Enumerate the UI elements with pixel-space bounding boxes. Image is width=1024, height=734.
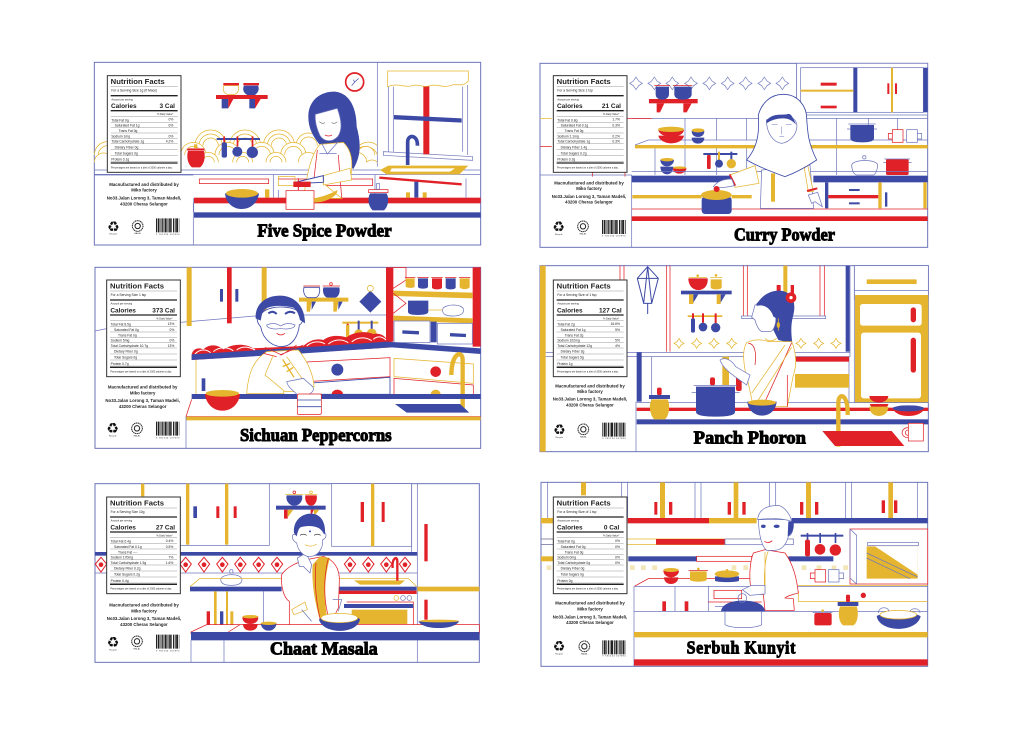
- oven box: [850, 529, 928, 584]
- nutrition facts: [107, 280, 180, 377]
- recycle, halal and barcode icons: 9 781234 567890: [156, 650, 180, 652]
- woman in headscarf: [713, 94, 822, 208]
- upper cabinets: [541, 482, 917, 518]
- blue shelf with pots: [681, 274, 732, 304]
- nutrition facts: Protein 0.7g: [111, 362, 129, 366]
- cutting board and mill: [286, 178, 337, 209]
- nutrition facts: % Daily Value*: [603, 317, 619, 320]
- recycle, halal and barcode icons: 9 781234 567890: [156, 234, 180, 236]
- nutrition facts: For a Serving Size 10g: [111, 510, 145, 514]
- nutrition facts: 13%: [168, 322, 174, 326]
- recycle, halal and barcode icons: [553, 423, 626, 440]
- nutrition facts: Calories: [557, 103, 583, 110]
- nutrition facts: % Daily Value*: [603, 534, 619, 537]
- recycle, halal and barcode icons: 9 781234 567890: [156, 437, 180, 439]
- nutrition facts: Saturated Fat 0.1g: [561, 124, 588, 128]
- blue bowl: [747, 400, 777, 416]
- nutrition facts: Percentages are based on a diet of 2000 calories a day.: [111, 166, 173, 169]
- recycle, halal and barcode icons: Recycle: [109, 649, 118, 651]
- woman in saree: [720, 291, 796, 407]
- panel: Serbuh Kunyit label: [541, 482, 928, 666]
- recycle, halal and barcode icons: ♻: [106, 421, 119, 437]
- tile ornaments: [630, 77, 789, 90]
- nutrition facts: Nutrition Facts: [111, 77, 165, 86]
- panel: Five Spice Powder label: [94, 62, 481, 245]
- manufacturer address: No33.Jalan Lorong 3, Taman Madeli,: [107, 616, 181, 621]
- worktop: [190, 558, 417, 594]
- rack with utensils: [217, 136, 260, 158]
- recycle, halal and barcode icons: Recycle: [109, 234, 118, 236]
- lower wall blocks: [637, 352, 849, 403]
- nutrition facts: 127 Cal: [599, 307, 622, 314]
- manufacturer address: Macnufactured and distributed by: [555, 601, 625, 606]
- faucet: [451, 354, 463, 408]
- nutrition facts: 0%: [169, 124, 173, 128]
- large plate: [319, 613, 360, 631]
- nutrition facts: 0%: [169, 134, 173, 138]
- manufacturer address: No33.Jalan Lorong 3, Taman Madeli,: [107, 195, 181, 200]
- nutrition facts: Amount per serving: [557, 98, 579, 101]
- manufacturer address: Miko factory: [130, 390, 156, 395]
- manufacturer address: 43200 Cheras Selangor: [119, 404, 167, 409]
- nutrition facts: Saturated Fat 0g: [114, 328, 139, 332]
- nutrition facts: Total Carbohydrate 12g: [557, 344, 592, 348]
- nutrition facts: 7%: [169, 556, 173, 560]
- counter bands: [634, 632, 928, 666]
- manufacturer address: [553, 383, 627, 408]
- nutrition facts: Total Fat 0.4g: [111, 540, 131, 544]
- nutrition facts: Percentages are based on a diet of 2000 calories a day.: [110, 371, 172, 374]
- recycle, halal and barcode icons: ♻: [107, 635, 119, 651]
- blue jar: [368, 183, 388, 210]
- blue shelf with pots: [276, 491, 326, 519]
- nutrition facts: Total Carbohydrate 1g: [557, 140, 590, 144]
- refrigerator: [854, 266, 928, 403]
- nutrition facts: Total Fat 0.8g: [557, 118, 578, 122]
- nutrition facts: Total Sugars 0.2g: [561, 151, 587, 155]
- recycle, halal and barcode icons: ♻: [553, 639, 565, 655]
- nutrition facts: Percentages are based on a diet of 2000 calories a day.: [557, 588, 619, 591]
- manufacturer address: 43200 Cheras Selangor: [566, 403, 614, 408]
- nutrition facts: % Daily Value*: [157, 113, 173, 116]
- nutrition facts: Trans Fat 0g: [565, 550, 584, 554]
- blue bowl: [225, 189, 259, 209]
- drawers: [196, 354, 481, 417]
- nutrition facts: 0%: [615, 561, 620, 565]
- nutrition facts: Calories: [557, 524, 583, 531]
- man with sash: [281, 514, 342, 625]
- upper cabinets: [141, 484, 479, 662]
- nutrition facts: Total Carbohydrate 10.7g: [111, 344, 148, 348]
- faint tile ornaments: [547, 565, 848, 570]
- pot with blue lid: [721, 594, 765, 628]
- blue pot with lid: [701, 186, 732, 214]
- hanging pot holder: [359, 285, 381, 313]
- nutrition facts: 13%: [168, 344, 174, 348]
- nutrition facts: 27 Cal: [156, 524, 175, 531]
- nutrition facts: 0%: [615, 545, 620, 549]
- nutrition facts: Nutrition Facts: [557, 281, 611, 290]
- recycle, halal and barcode icons: HALAL: [134, 647, 141, 650]
- nutrition facts: Sodium 1.1mg: [557, 134, 579, 138]
- kitchen scene: chaat masala: [95, 484, 479, 662]
- recycle, halal and barcode icons: [107, 219, 180, 236]
- recycle, halal and barcode icons: 9 781234 567890: [602, 438, 626, 440]
- manufacturer address: 43200 Cheras Selangor: [120, 622, 168, 627]
- nutrition facts: Trans Fat 0g: [118, 333, 137, 337]
- mugs: [810, 570, 844, 582]
- recycle, halal and barcode icons: Recycle: [109, 435, 117, 437]
- recycle, halal and barcode icons: [553, 639, 626, 658]
- mug: [902, 423, 923, 441]
- kitchen scene: five spice: [94, 62, 481, 245]
- manufacturer address: [552, 180, 626, 204]
- nutrition facts: 0 Cal: [604, 524, 620, 531]
- back shelf items: [634, 568, 928, 666]
- counter bands: [636, 402, 928, 452]
- nutrition facts: 0.3%: [612, 124, 620, 128]
- nutrition facts: Amount per serving: [111, 520, 133, 523]
- manufacturer address: Macnufactured and distributed by: [109, 603, 179, 608]
- nutrition facts: Total Sugars 5g: [561, 356, 584, 360]
- yellow shell tile pattern: [94, 130, 377, 162]
- nutrition facts: Nutrition Facts: [557, 77, 611, 86]
- rack with utensils: [342, 321, 378, 340]
- nutrition facts: Protein 0.2g: [557, 158, 575, 162]
- manufacturer address: Macnufactured and distributed by: [555, 383, 625, 388]
- nutrition facts: Total Fat 8.5g: [111, 323, 131, 327]
- nutrition facts: 0%: [169, 118, 173, 122]
- nutrition facts: 1.6%: [166, 561, 173, 565]
- nutrition facts: Trans Fat 0g: [119, 129, 138, 133]
- red jar: [187, 144, 205, 167]
- nutrition facts: Calories: [557, 307, 583, 314]
- kitchen shelf and items: [635, 124, 928, 148]
- nutrition facts: Percentages are based on a diet of 2000 calories a day.: [557, 166, 619, 169]
- manufacturer address: Miko factory: [131, 608, 157, 613]
- nutrition facts: 4.2%: [166, 140, 173, 144]
- nutrition facts: Amount per serving: [111, 98, 133, 101]
- counter: [632, 172, 928, 221]
- nutrition facts: Total Sugars 0.2g: [114, 573, 140, 577]
- nutrition facts: Sodium 1mg: [111, 134, 130, 138]
- manufacturer address: Miko factory: [577, 606, 603, 611]
- manufacturer address: Miko factory: [577, 389, 603, 394]
- nutrition facts: 0.2%: [612, 134, 620, 138]
- nutrition facts: 0.4%: [166, 539, 173, 543]
- wok: [877, 608, 921, 629]
- nutrition facts: Amount per serving: [557, 520, 579, 523]
- nutrition facts: Protein 1g: [557, 362, 573, 366]
- nutrition facts: Sodium 0mg: [557, 556, 576, 560]
- manufacturer address: No33.Jalan Lorong 3, Taman Madeli,: [552, 194, 626, 199]
- nutrition facts: % Daily Value*: [156, 317, 173, 320]
- manufacturer address: [553, 601, 627, 625]
- manufacturer address: Miko factory: [576, 186, 602, 191]
- rack with utensils: [703, 152, 737, 169]
- lantern: [637, 267, 658, 314]
- nutrition facts: 21 Cal: [602, 103, 621, 110]
- nutrition facts: % Daily Value*: [603, 113, 619, 116]
- rack with utensils: [801, 533, 843, 556]
- manufacturer address: Miko factory: [131, 188, 157, 193]
- nutrition facts: 0.3%: [612, 140, 620, 144]
- rack with utensils: [688, 313, 722, 333]
- recycle, halal and barcode icons: [106, 421, 180, 439]
- nutrition facts: Trans Fat 0g: [565, 129, 584, 133]
- product title: Curry Powder: [734, 225, 835, 245]
- nutrition facts: 4%: [615, 344, 620, 348]
- nutrition facts: Percentages are based on a diet of 2000 calories a day.: [557, 371, 619, 374]
- nutrition facts: Nutrition Facts: [110, 281, 164, 290]
- nutrition facts: Total Sugars 0g: [114, 356, 137, 360]
- recycle, halal and barcode icons: HALAL: [580, 435, 588, 438]
- manufacturer address: [107, 603, 181, 627]
- nutrition facts: 0%: [615, 539, 620, 543]
- kitchen scene: panch phoron: [540, 266, 928, 452]
- nutrition facts: 5%: [615, 339, 620, 343]
- nutrition facts: For a Serving Size 1 tsp: [111, 293, 146, 297]
- recycle, halal and barcode icons: Recycle: [555, 653, 564, 655]
- nutrition facts: Protein 0g: [557, 579, 573, 583]
- red and blue bands: [194, 198, 481, 218]
- recycle, halal and barcode icons: ♻: [552, 220, 565, 236]
- nutrition facts: 0%: [170, 328, 174, 332]
- window: [383, 71, 473, 160]
- red sink: [822, 431, 904, 446]
- cabinets: [187, 267, 267, 326]
- man in cap: [742, 505, 798, 610]
- nutrition facts: Dietary Fiber 1.4g: [561, 145, 587, 149]
- nutrition facts: Total Carbohydrate 1.5g: [111, 561, 146, 565]
- manufacturer address: No33.Jalan Lorong 3, Taman Madeli,: [553, 397, 627, 402]
- yellow tile ornaments: [674, 338, 841, 348]
- counter: [186, 394, 481, 448]
- shelving unit: [386, 267, 481, 347]
- woman cooking: [295, 92, 360, 198]
- product title: Chaat Masala: [270, 639, 378, 659]
- product title: Panch Phoron: [694, 427, 806, 447]
- nutrition facts: Total Sugars 0g: [561, 573, 584, 577]
- nutrition facts: For a Serving Size 1 tsp: [557, 89, 593, 93]
- nutrition facts: [107, 497, 180, 594]
- kitchen scene: curry: [540, 63, 928, 247]
- manufacturer address: No33.Jalan Lorong 3, Taman Madeli,: [105, 398, 180, 403]
- drawers: [199, 179, 373, 186]
- kitchen scene: serbuh kunyit: [541, 482, 928, 666]
- bowls: [242, 615, 459, 631]
- nutrition facts: Total Carbohydrate 0g: [557, 561, 590, 565]
- nutrition facts: Sodium 170mg: [111, 556, 133, 560]
- nutrition facts: Percentages are based on a diet of 2000 calories a day.: [110, 588, 172, 591]
- manufacturer address: 43200 Cheras Selangor: [565, 199, 613, 204]
- recycle, halal and barcode icons: Recycle: [555, 437, 564, 439]
- shelf with pots: [216, 83, 268, 108]
- lower wall items: [207, 591, 263, 625]
- lower left bowls: [660, 158, 687, 174]
- cabinets below: [634, 585, 928, 611]
- man cooking: [247, 296, 314, 396]
- product title: Sichuan Peppercorns: [240, 425, 392, 445]
- recycle, halal and barcode icons: HALAL: [580, 232, 587, 235]
- nutrition facts: Saturated Fat 1g: [561, 328, 586, 332]
- nutrition facts: Amount per serving: [111, 303, 133, 306]
- yellow shelf with pots: [299, 283, 348, 312]
- manufacturer address: Macnufactured and distributed by: [554, 180, 624, 185]
- nutrition facts: Total Carbohydrate 1g: [111, 140, 144, 144]
- nutrition facts: Dietary Fiber 0g: [561, 567, 584, 571]
- red shelf with pots: [649, 86, 698, 112]
- product title: Five Spice Powder: [257, 221, 392, 241]
- manufacturer address: No33.Jalan Lorong 3, Taman Madeli,: [553, 614, 627, 619]
- nutrition facts: 0.5%: [166, 545, 173, 549]
- yellow jar: [649, 388, 670, 419]
- nutrition facts: Dietary Fiber 3g: [561, 350, 584, 354]
- recycle, halal and barcode icons: ♻: [107, 219, 120, 235]
- nutrition facts: Trans Fat ----: [118, 550, 137, 554]
- right pots: [852, 156, 912, 175]
- nutrition facts: Trans Fat 2g: [565, 333, 584, 337]
- manufacturer address: Macnufactured and distributed by: [108, 385, 178, 390]
- panel: Panch Phoron label: [540, 266, 928, 452]
- nutrition facts: [553, 497, 627, 594]
- nutrition facts: For a Serving Size 1g (if Mace): [111, 89, 157, 93]
- panel: Curry Powder label: [540, 63, 928, 247]
- faucet: [838, 396, 848, 447]
- blue worktop band: [192, 342, 481, 360]
- product title: Serbuh Kunyit: [687, 638, 796, 658]
- red wave tile backsplash: [192, 332, 392, 360]
- panel: Sichuan Peppercorns label: [95, 267, 481, 448]
- recycle, halal and barcode icons: HALAL: [134, 434, 141, 437]
- panel: Chaat Masala label: [95, 484, 479, 662]
- nutrition facts: Dietary Fiber 0g: [115, 145, 138, 149]
- manufacturer address: 43200 Cheras Selangor: [566, 620, 614, 625]
- yellow jar: [838, 593, 866, 625]
- stove and oven: [344, 596, 413, 625]
- recycle, halal and barcode icons: Recycle: [555, 234, 563, 236]
- recycle, halal and barcode icons: [552, 220, 626, 237]
- recycle, halal and barcode icons: 9 781234 567890: [602, 656, 626, 658]
- nutrition facts: 0%: [615, 556, 620, 560]
- nutrition facts: 1.7%: [612, 118, 620, 122]
- nutrition facts: 16.6%: [611, 322, 620, 326]
- manufacturer address: 43200 Cheras Selangor: [120, 201, 168, 206]
- nutrition facts: 3 Cal: [159, 103, 175, 110]
- recycle, halal and barcode icons: 9 781234 567890: [602, 235, 626, 237]
- manufacturer address: [107, 182, 181, 206]
- nutrition facts: [107, 76, 181, 172]
- nutrition facts: Calories: [110, 307, 136, 314]
- nutrition facts: Protein 0.1g: [111, 158, 129, 162]
- nutrition facts: Saturated Fat 0.1g: [114, 545, 142, 549]
- nutrition facts: Total Fat 0g: [111, 118, 129, 122]
- nutrition facts: Dietary Fiber 0.2g: [114, 567, 141, 571]
- nutrition facts: Total Fat 2g: [557, 323, 575, 327]
- red pot: [813, 609, 832, 625]
- nutrition facts: Saturated Fat 0g: [561, 545, 586, 549]
- nutrition facts: For a Serving Size of 1 tsp: [557, 293, 597, 297]
- border tiles: [95, 552, 417, 573]
- faucet: [408, 137, 417, 165]
- recycle, halal and barcode icons: [107, 635, 180, 652]
- nutrition facts: [553, 76, 627, 172]
- upper cabinets: [797, 63, 928, 115]
- nutrition facts: Nutrition Facts: [110, 498, 164, 507]
- nutrition facts: Sodium 102mg: [557, 339, 580, 343]
- nutrition facts: Amount per serving: [557, 303, 579, 306]
- bowls and plate: [869, 396, 924, 416]
- nutrition facts: 5%: [615, 328, 620, 332]
- recycle, halal and barcode icons: HALAL: [581, 652, 589, 655]
- nutrition facts: Sodium 5mg: [111, 339, 129, 343]
- icon: wall clock: [346, 73, 364, 91]
- nutrition facts: Nutrition Facts: [557, 498, 611, 507]
- nutrition facts: Total Fat 0g: [557, 540, 575, 544]
- recycle, halal and barcode icons: ♻: [553, 423, 566, 439]
- lower counter: [191, 625, 479, 662]
- nutrition facts: 373 Cal: [152, 307, 175, 314]
- nutrition facts: Dietary Fiber 0g: [114, 350, 138, 354]
- recycle, halal and barcode icons: HALAL: [134, 232, 142, 235]
- nutrition facts: 0%: [170, 339, 174, 343]
- nutrition facts: % Daily Value*: [156, 534, 173, 537]
- nutrition facts: [553, 280, 627, 377]
- nutrition facts: For a Serving Size of 1 tsp: [557, 510, 597, 514]
- manufacturer address: Macnufactured and distributed by: [109, 182, 179, 187]
- white pot: [221, 570, 242, 585]
- manufacturer address: [105, 385, 180, 409]
- red bowl: [205, 390, 240, 411]
- blue pot: [692, 377, 740, 417]
- nutrition facts: Total Sugars 0g: [115, 151, 138, 155]
- kitchen scene: sichuan: [95, 267, 481, 448]
- nutrition facts: Calories: [111, 103, 137, 110]
- nutrition facts: Calories: [110, 524, 136, 531]
- nutrition facts: Protein 0.4g: [111, 579, 129, 583]
- colored bands: [541, 518, 928, 561]
- nutrition facts: Saturated Fat 1g: [115, 124, 140, 128]
- jar: [297, 394, 321, 414]
